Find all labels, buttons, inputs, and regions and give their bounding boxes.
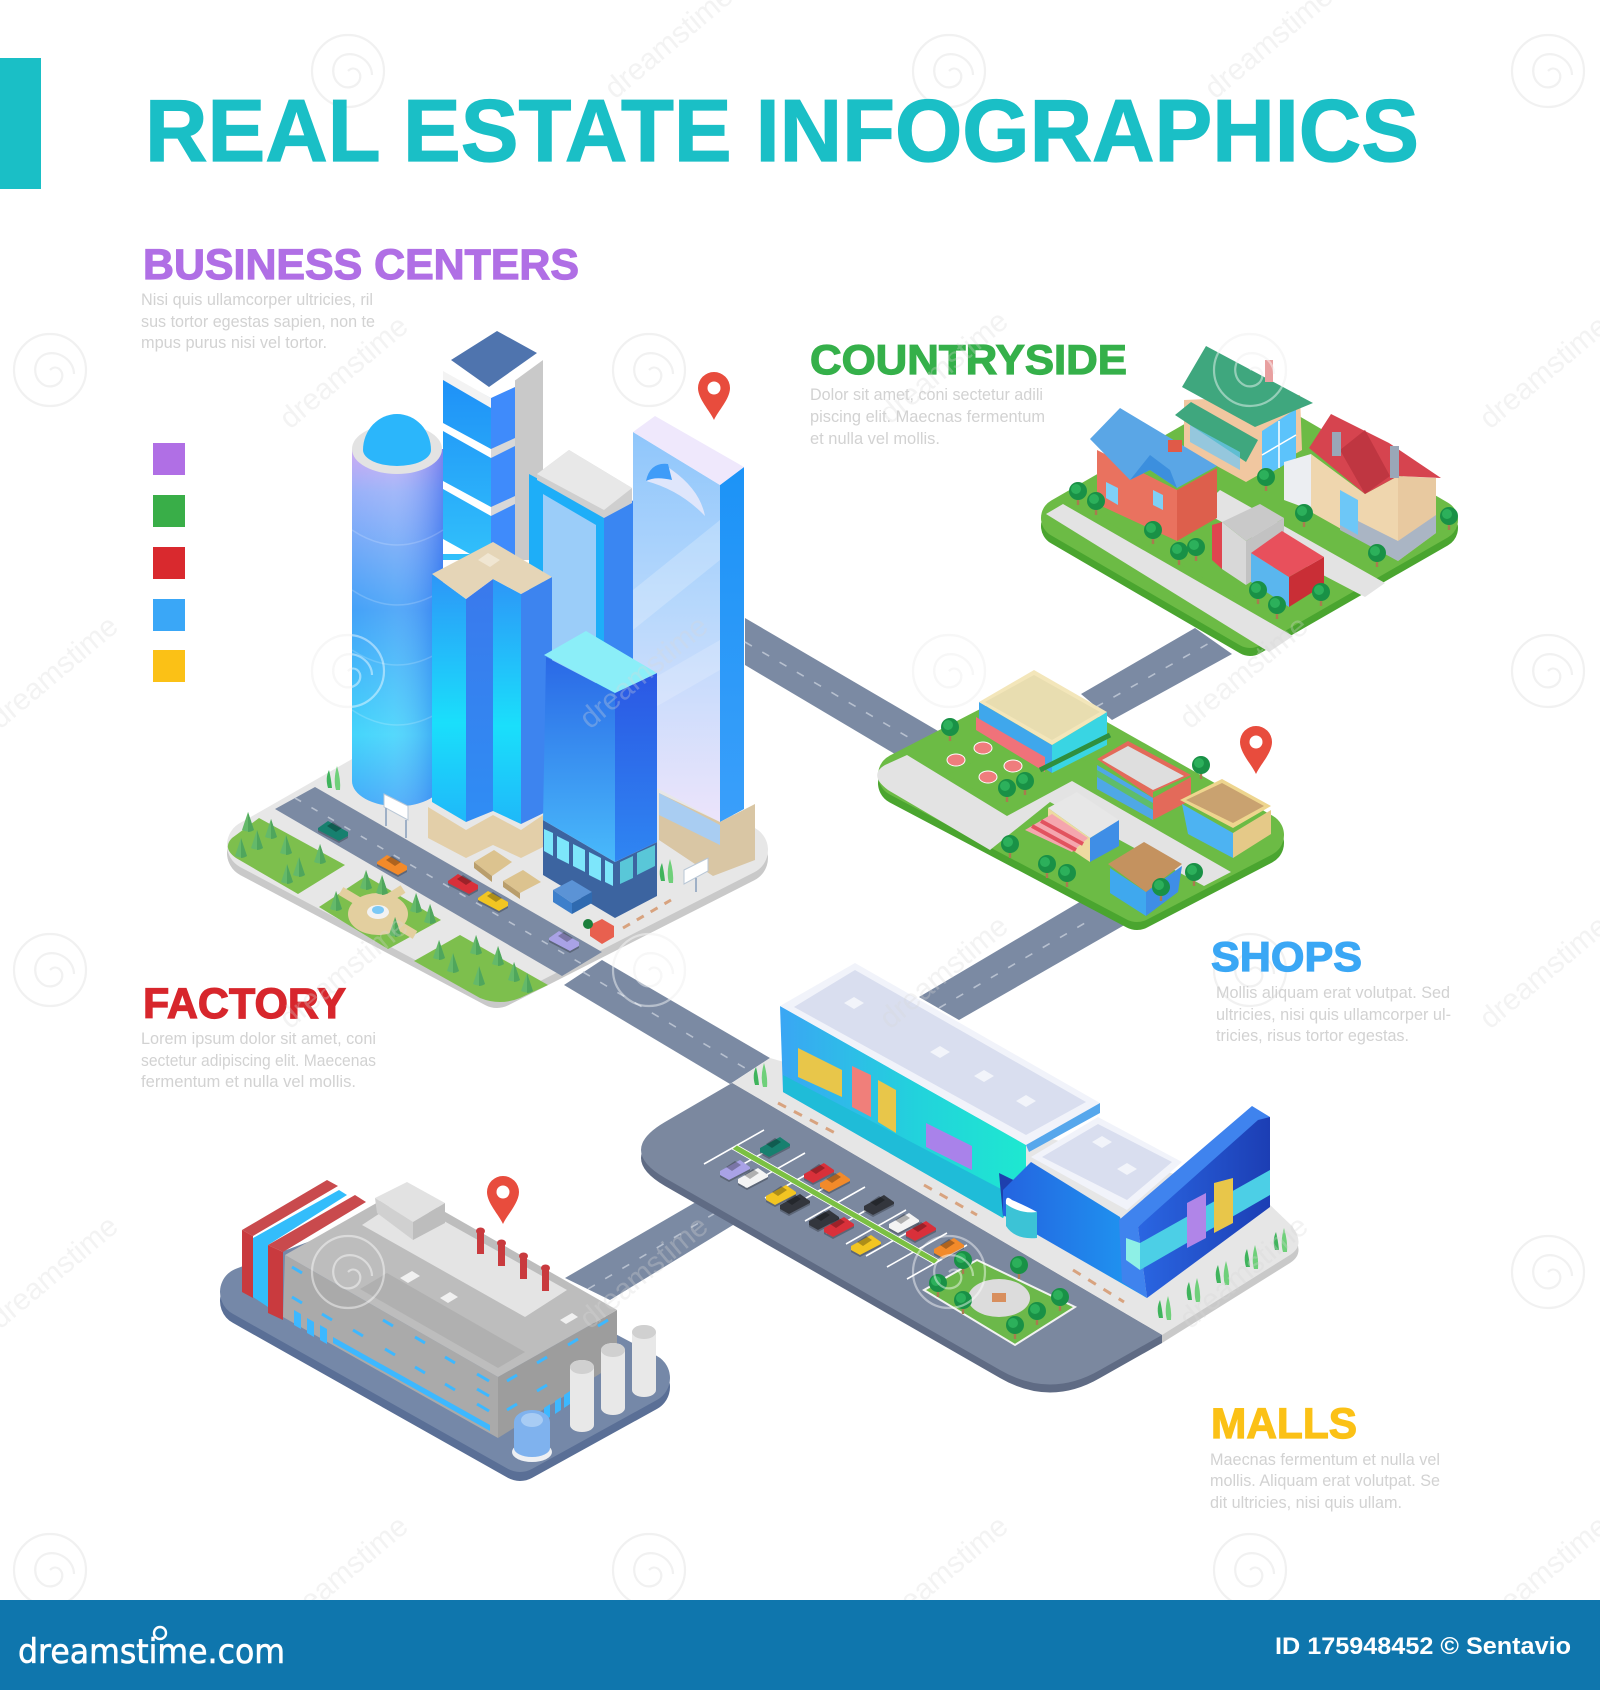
round glass tower with dome <box>352 414 443 806</box>
panel: factory district <box>242 1176 656 1462</box>
yard trees <box>1069 468 1458 619</box>
text: business centers description: sus tortor egestas sapien, non te <box>141 313 375 331</box>
map pin <box>487 1176 519 1224</box>
colour legend squares <box>153 443 185 682</box>
sidewalk paving marks <box>778 1103 1124 1302</box>
text: factory description: fermentum et nulla vel mollis. <box>141 1073 356 1091</box>
green roof house <box>1175 346 1313 482</box>
storage tanks <box>570 1325 656 1432</box>
watermark wordmarks: dreamstime <box>573 1209 715 1335</box>
cafe with striped awning <box>1025 792 1119 862</box>
connecting roads <box>564 618 1232 1300</box>
parking bay lines <box>704 1130 967 1279</box>
low tan kiosks <box>474 850 541 899</box>
billboards, kiosk and truck <box>384 794 708 944</box>
blue roof house <box>1090 408 1217 541</box>
garden <box>924 1251 1075 1345</box>
text: countryside description: piscing elit. Maecnas fermentum <box>810 408 1045 426</box>
watermark wordmarks: dreamstime <box>1173 1209 1315 1335</box>
text: shops description <box>1216 984 1451 1045</box>
heading: malls: MALLS <box>1211 1400 1357 1448</box>
sidewalks <box>1046 490 1385 652</box>
watermark wordmarks: dreamstime <box>873 304 1015 430</box>
text: factory description: sectetur adipiscing elit. Maecenas <box>141 1052 376 1070</box>
text: factory description: Lorem ipsum dolor sit amet, coni <box>141 1030 376 1048</box>
footer brand swirl icon <box>154 1627 166 1639</box>
red pavilion <box>1251 531 1324 607</box>
rotunda entrance <box>1006 1204 1037 1238</box>
platform <box>245 1240 645 1456</box>
heading: shops: SHOPS <box>1211 933 1362 980</box>
title: REAL ESTATE INFOGRAPHICS <box>145 81 1419 180</box>
park plaza with fountain <box>341 889 415 935</box>
red chimneys <box>476 1228 550 1291</box>
building with white roof <box>529 450 634 720</box>
front glass tower <box>543 631 657 918</box>
text: malls description: mollis. Aliquam erat volutpat. Se <box>1210 1472 1440 1490</box>
bottom shop <box>1108 842 1182 916</box>
watermark wordmarks: dreamstime <box>273 309 415 435</box>
blue water tank <box>512 1410 552 1462</box>
rooftop hut <box>375 1182 445 1240</box>
tall glass tower with arch <box>633 416 755 876</box>
parked cars <box>720 1137 964 1260</box>
watermark wordmarks: dreamstime <box>573 609 715 735</box>
text: countryside description <box>810 386 1045 448</box>
panel: mall district <box>641 963 1299 1392</box>
panel: shops district <box>877 670 1272 916</box>
map pin <box>698 372 730 420</box>
shop street <box>877 755 1231 886</box>
text: factory description <box>141 1030 376 1091</box>
text: malls description: dit ultricies, nisi quis ullam. <box>1210 1494 1402 1512</box>
text: business centers description <box>141 291 375 352</box>
red shop <box>1097 741 1191 820</box>
heading: countryside: COUNTRYSIDE <box>810 336 1127 383</box>
heading: business centers: BUSINESS CENTERS <box>143 241 579 289</box>
cross plan tower <box>428 542 552 858</box>
parking divider <box>732 1145 939 1264</box>
parking lot <box>641 1083 1162 1392</box>
text: shops description: tricies, risus tortor egestas. <box>1216 1027 1409 1045</box>
footer image credit: ID 175948452 © Sentavio <box>1275 1633 1571 1660</box>
footer bar <box>0 1600 1600 1690</box>
watermark wordmarks: dreamstime <box>1173 609 1315 735</box>
title accent block <box>0 58 41 189</box>
mall main block <box>780 963 1100 1218</box>
map pin <box>1240 726 1272 774</box>
platform <box>252 705 743 983</box>
tan shop <box>1180 779 1271 858</box>
cafe tables <box>947 742 1022 783</box>
city road <box>275 787 602 976</box>
conifer trees <box>235 766 673 993</box>
platform <box>1061 410 1438 636</box>
heading: factory: FACTORY <box>143 980 346 1028</box>
green lots <box>228 818 548 1002</box>
watermark wordmarks: dreamstime <box>873 909 1015 1035</box>
road cars <box>318 821 579 953</box>
text: business centers description: Nisi quis ullamcorper ultricies, ril <box>141 291 373 309</box>
text: shops description: ultricies, nisi quis ullamcorper ul- <box>1216 1006 1451 1024</box>
back tower <box>443 331 543 560</box>
text: malls description: Maecnas fermentum et nulla vel <box>1210 1451 1440 1469</box>
platform <box>900 706 1262 908</box>
main restaurant <box>976 670 1110 773</box>
factory block <box>283 1188 617 1438</box>
footer brand: dreamstime.com <box>18 1632 285 1672</box>
watermark wordmarks: dreamstime <box>873 1509 1015 1635</box>
panel: countryside district <box>1046 346 1458 652</box>
text: shops description: Mollis aliquam erat volutpat. Sed <box>1216 984 1450 1002</box>
watermark spirals over artwork <box>312 334 1286 1308</box>
gray modern house <box>1212 504 1284 585</box>
text: malls description <box>1210 1451 1440 1512</box>
panel: business centers district <box>228 331 755 1002</box>
text: business centers description: mpus purus nisi vel tortor. <box>141 334 327 352</box>
red roof house <box>1284 414 1441 561</box>
red frames with blue glass <box>242 1180 366 1320</box>
sidewalk pad <box>732 1058 1299 1343</box>
watermark wordmarks: dreamstime <box>273 909 415 1035</box>
watermark wordmarks: dreamstime <box>273 1509 415 1635</box>
text: countryside description: et nulla vel mollis. <box>810 430 940 448</box>
mall shrubs <box>754 1063 1287 1320</box>
shop trees <box>941 718 1210 901</box>
text: countryside description: Dolor sit amet, coni sectetur adili <box>810 386 1043 404</box>
mall glass wing <box>999 1106 1270 1298</box>
